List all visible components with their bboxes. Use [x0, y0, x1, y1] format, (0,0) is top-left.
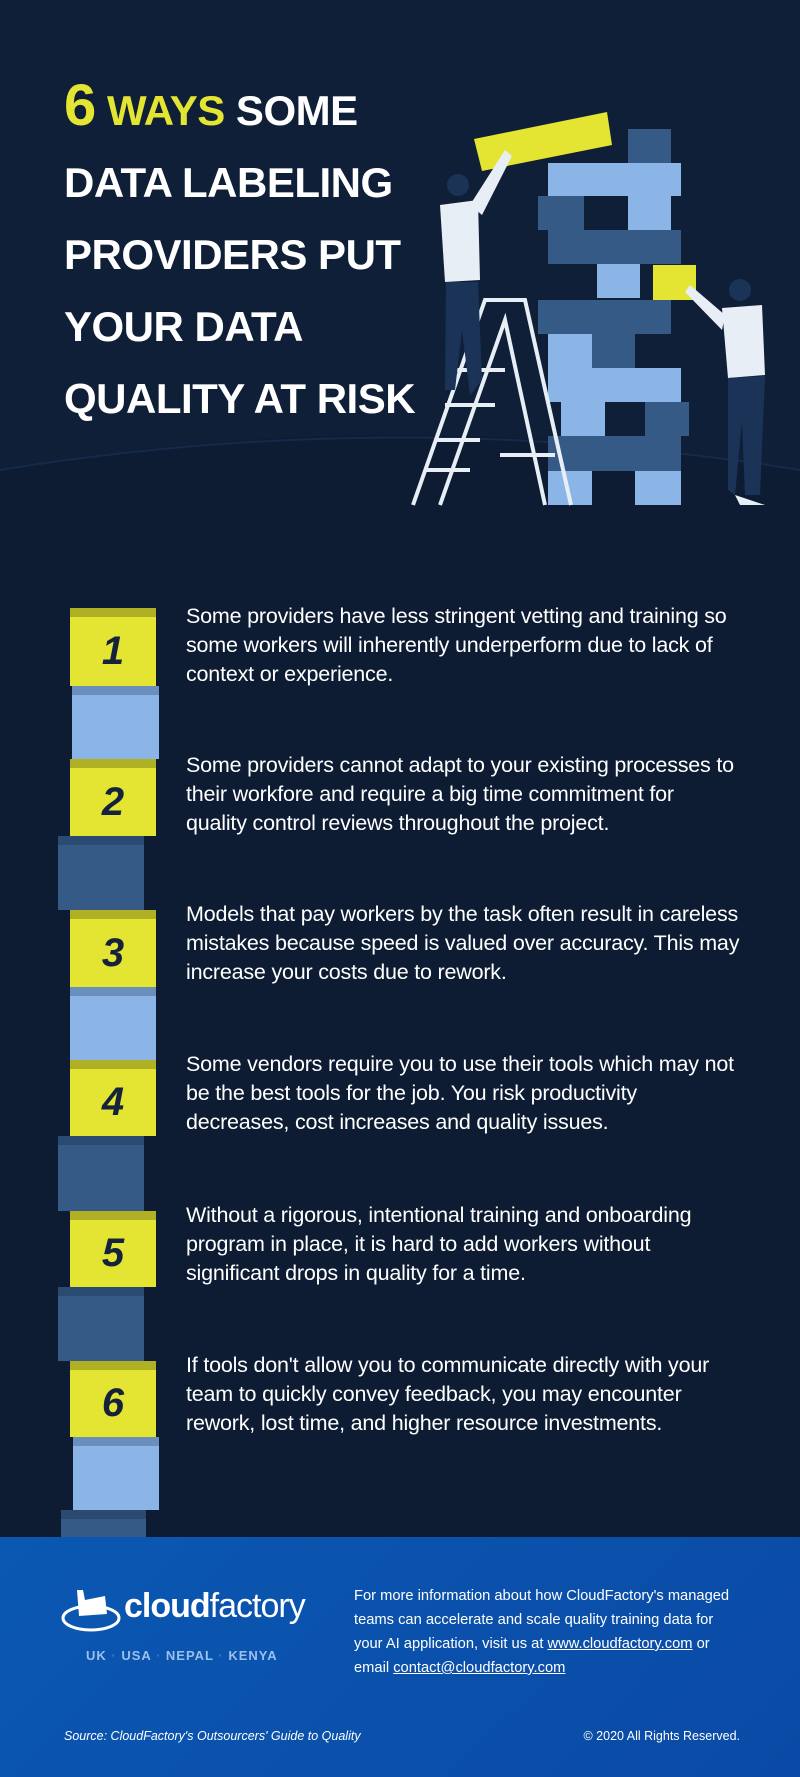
source: Source: CloudFactory's Outsourcers' Guide to Quality [64, 1729, 361, 1743]
icon: cloud factory [62, 1590, 120, 1632]
item 1 text [186, 604, 727, 686]
contact text: For more information about how CloudFactory's managed teams can accelerate and scale quality training data for your AI application, visit us at www.cloudfactory.com or email contact@cloudfactory.com [354, 1588, 729, 1676]
title [64, 73, 416, 422]
item 2 text: Some providers cannot adapt to your existing processes to [186, 753, 734, 777]
logo [62, 1587, 306, 1632]
title: QUALITY AT RISK [64, 375, 415, 422]
logo: cloudfactory [124, 1587, 305, 1625]
item 3 text: increase your costs due to rework. [186, 960, 507, 984]
stacked number blocks [58, 608, 159, 1537]
item 6 text [186, 1353, 709, 1435]
item 1 text: context or experience. [186, 662, 393, 686]
item 5 text [186, 1203, 691, 1285]
title: YOUR DATA [64, 303, 303, 350]
worker right [685, 279, 765, 505]
worker left [440, 150, 512, 395]
stacked number blocks: 1 [102, 629, 124, 673]
item 2 text: their workfore and require a big time commitment for [186, 782, 674, 806]
item 4 text: be the best tools for the job. You risk productivity [186, 1081, 637, 1105]
stacked number blocks: 4 [102, 1080, 124, 1124]
item 1 text: some workers will inherently underperform due to lack of [186, 633, 713, 657]
item 5 text: Without a rigorous, intentional training and onboarding [186, 1203, 691, 1227]
item 4 text: Some vendors require you to use their tools which may not [186, 1052, 734, 1076]
item 1 text: Some providers have less stringent vetting and training so [186, 604, 727, 628]
item 2 text: quality control reviews throughout the project. [186, 811, 609, 835]
stacked number blocks: 2 [102, 780, 124, 824]
item 4 text [186, 1052, 734, 1134]
title: DATA LABELING [64, 159, 393, 206]
item 5 text: significant drops in quality for a time. [186, 1261, 526, 1285]
footer [0, 1537, 800, 1777]
stacked number blocks: 6 [102, 1381, 124, 1425]
stacked number blocks: 5 [102, 1231, 124, 1275]
illustration: block tower with workers [411, 112, 765, 506]
title: 6 WAYS SOME [64, 73, 358, 138]
yellow blocks [474, 112, 696, 300]
item 6 text: rework, lost time, and higher resource investments. [186, 1411, 662, 1435]
tower blocks [538, 129, 689, 505]
copyright: © 2020 All Rights Reserved. [583, 1729, 740, 1743]
item 6 text: team to quickly convey feedback, you may encounter [186, 1382, 682, 1406]
title: PROVIDERS PUT [64, 231, 401, 278]
ladder [413, 300, 571, 505]
item 3 text [186, 902, 740, 984]
item 5 text: program in place, it is hard to add workers without [186, 1232, 650, 1256]
locations: UK · USA · NEPAL · KENYA [86, 1648, 278, 1663]
item 4 text: decreases, cost increases and quality issues. [186, 1110, 608, 1134]
item 3 text: mistakes because speed is valued over accuracy. This may [186, 931, 739, 955]
item 6 text: If tools don't allow you to communicate directly with your [186, 1353, 709, 1377]
stacked number blocks: 3 [102, 931, 124, 975]
item 2 text [186, 753, 734, 835]
item 3 text: Models that pay workers by the task often result in careless [186, 902, 738, 926]
